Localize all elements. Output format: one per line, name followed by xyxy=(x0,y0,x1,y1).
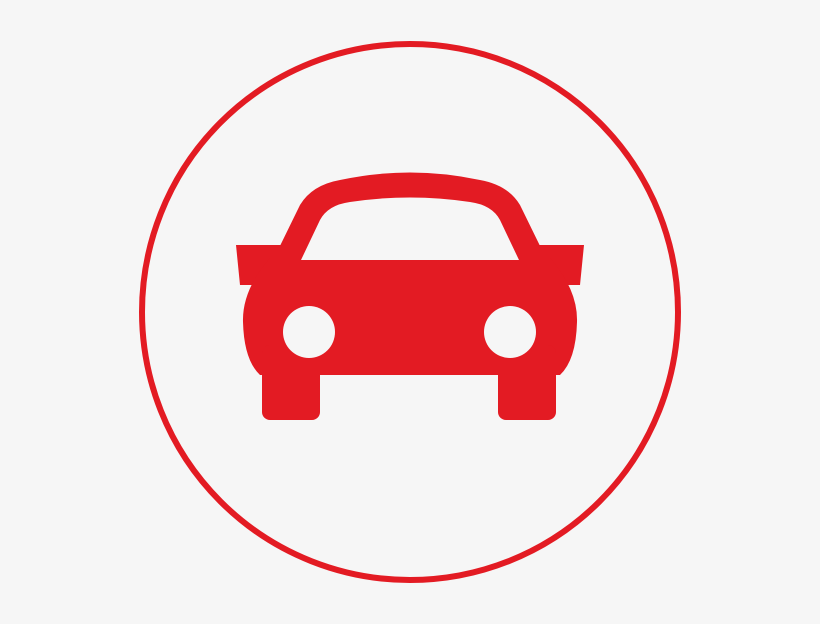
car body xyxy=(243,258,577,375)
car roof xyxy=(278,172,542,250)
car side mirrors band xyxy=(236,245,584,285)
car wheels xyxy=(262,345,320,420)
icon: car xyxy=(236,172,584,420)
icon: circle outline xyxy=(142,44,678,580)
car headlights xyxy=(283,306,536,358)
car windshield xyxy=(301,198,519,260)
